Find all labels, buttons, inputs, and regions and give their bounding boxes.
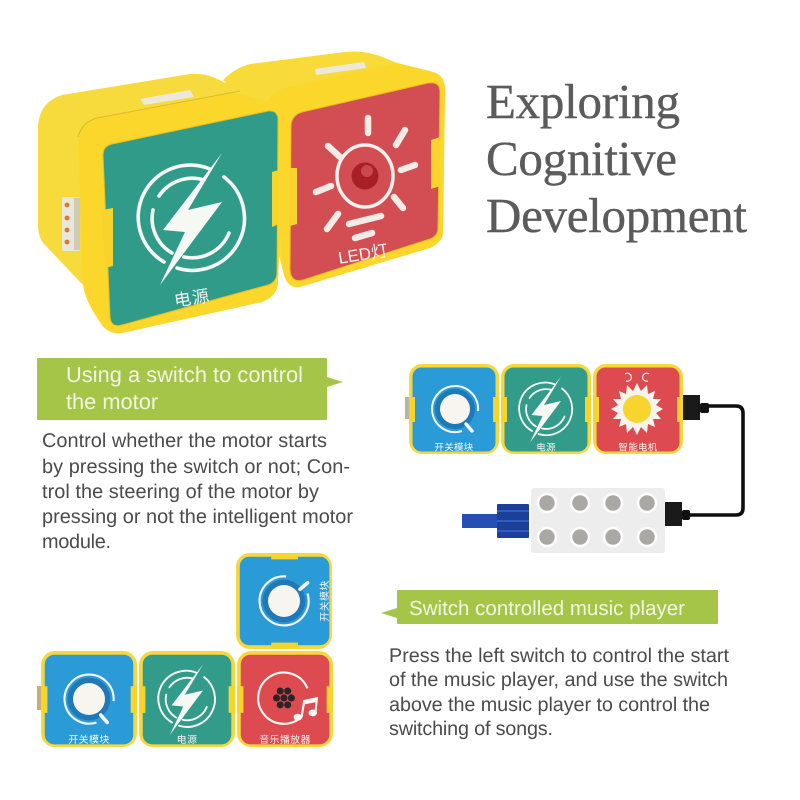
intelligent motor module xyxy=(593,364,683,454)
text block: music player description: switching of songs. xyxy=(389,718,553,740)
LED module red face xyxy=(290,83,440,281)
icon: music player xyxy=(258,673,318,724)
title xyxy=(486,74,747,243)
text block: motor description: module. xyxy=(42,531,111,553)
banner: switch controlled music player xyxy=(381,590,718,624)
LED module body xyxy=(223,52,445,286)
connector stub xyxy=(37,686,42,710)
LED module top clip xyxy=(315,62,366,75)
text block: motor description xyxy=(42,430,353,553)
power module body xyxy=(38,74,284,333)
LED module side tabs xyxy=(290,137,440,226)
power module: 电源 xyxy=(177,733,198,745)
power module connector xyxy=(62,197,80,251)
power module side tabs xyxy=(102,170,279,268)
text block: motor description: by pressing the switch or not; Con- xyxy=(42,456,350,478)
text block: motor description: Control whether the motor starts xyxy=(42,430,327,452)
diagram: motor circuit xyxy=(405,364,743,553)
switch module xyxy=(41,651,137,747)
green power module (3D) xyxy=(38,74,284,333)
switch module: 开关模块 xyxy=(68,733,110,745)
motor brick with studs xyxy=(531,488,665,553)
banner: using a switch xyxy=(37,358,343,420)
rotated switch module xyxy=(236,553,332,649)
connector stub xyxy=(405,397,410,419)
banner: switch controlled music player: Switch controlled music player xyxy=(409,597,685,620)
text block: music player description xyxy=(389,645,730,740)
USB cable xyxy=(665,395,743,526)
title: Cognitive xyxy=(486,131,677,186)
icon: light bulb xyxy=(316,118,415,238)
icon: sun gear xyxy=(611,383,663,435)
red LED module (3D) xyxy=(223,52,445,287)
LED module label: LED灯 xyxy=(337,241,389,268)
text block: music player description: above the music player to control the xyxy=(389,694,710,716)
music player module: 音乐播放器 xyxy=(259,733,311,745)
power module xyxy=(501,364,591,454)
switch module xyxy=(409,364,499,454)
rotated switch module: 开关模块 xyxy=(318,580,330,622)
icon: lightning bolt in rings xyxy=(138,153,244,285)
title: Exploring xyxy=(486,74,680,129)
blue gear shaft xyxy=(462,504,529,538)
text block: music player description: of the music player, and use the switch xyxy=(389,669,728,691)
music player module xyxy=(237,651,333,747)
text block: motor description: pressing or not the intelligent motor xyxy=(42,506,353,528)
power module: 电源 xyxy=(536,442,556,454)
power module label: 电源 xyxy=(173,286,211,311)
title: Development xyxy=(486,188,747,243)
icon: rotation curls xyxy=(625,373,649,381)
power module top clip xyxy=(140,90,194,105)
power module green face xyxy=(103,111,278,326)
intelligent motor module: 智能电机 xyxy=(618,442,658,454)
power module xyxy=(139,651,235,747)
text block: music player description: Press the left switch to control the start xyxy=(389,645,730,667)
text block: motor description: trol the steering of the motor by xyxy=(42,481,319,503)
diagram: music player circuit xyxy=(37,553,333,747)
switch module: 开关模块 xyxy=(434,442,474,454)
banner: using a switch: Using a switch to control xyxy=(66,362,303,387)
banner: using a switch: the motor xyxy=(66,389,158,414)
